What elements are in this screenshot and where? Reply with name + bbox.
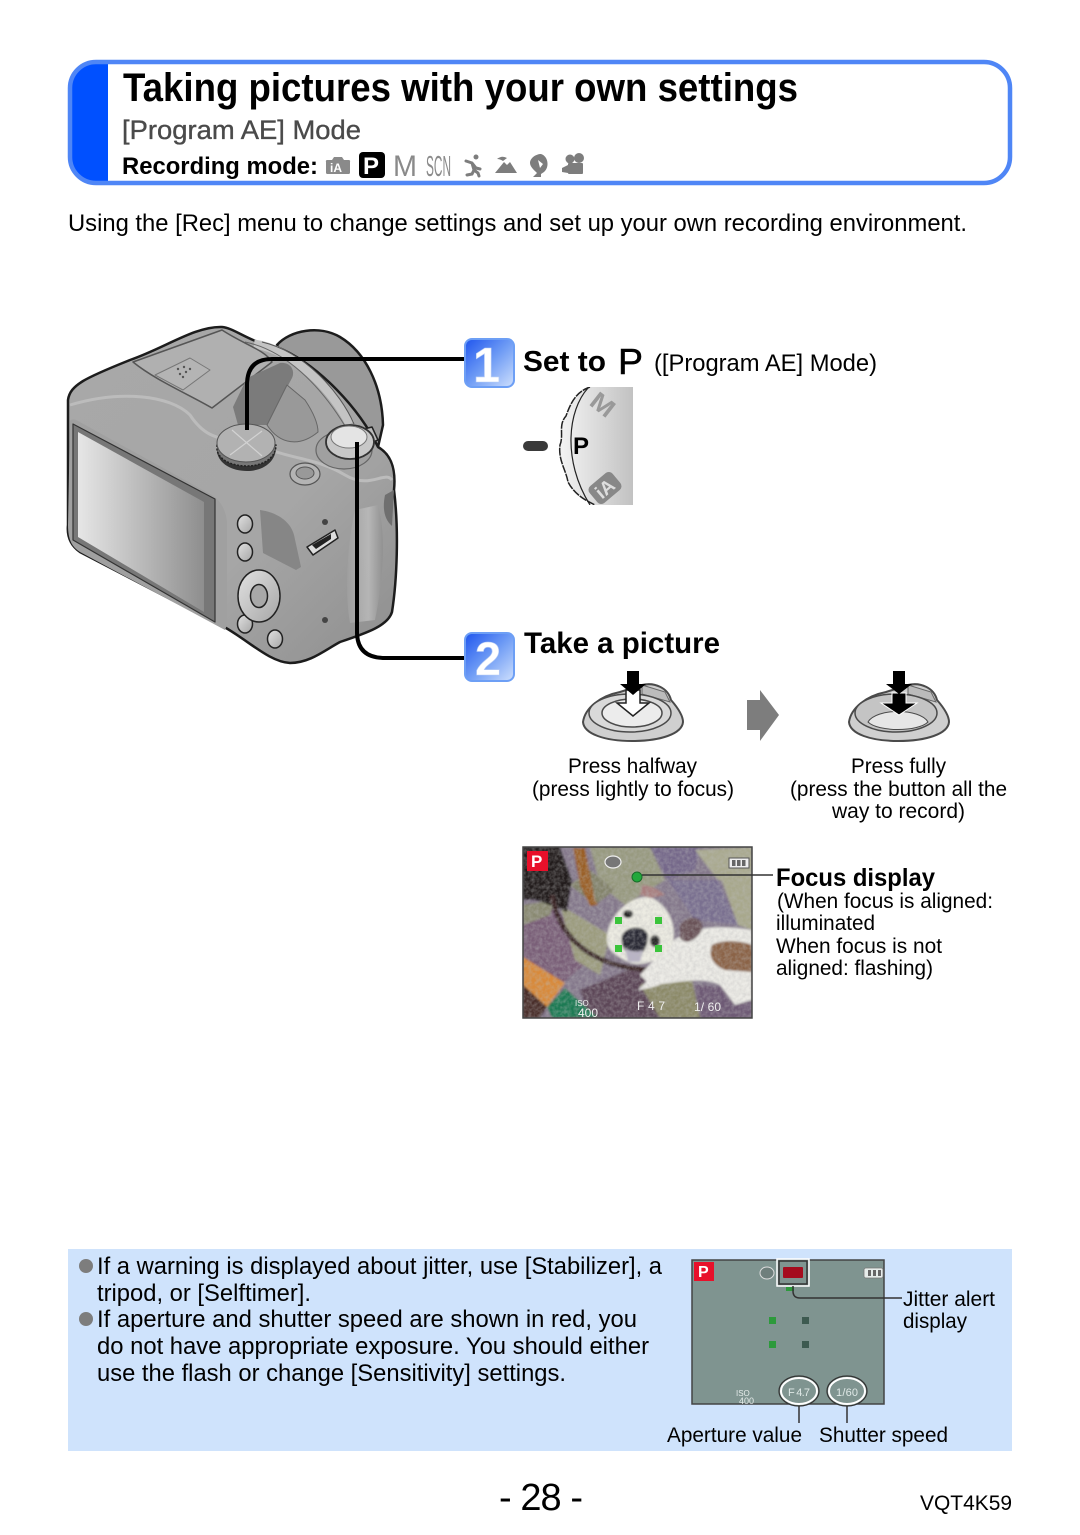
photo readouts: ISO bbox=[575, 999, 589, 1008]
icon: motion picture bbox=[562, 153, 584, 174]
icon: P: P bbox=[618, 341, 643, 382]
rear buttons bbox=[238, 515, 282, 648]
icon: sports bbox=[466, 154, 480, 176]
photo overlay icons bbox=[605, 856, 749, 868]
photo readouts: F 4 7 bbox=[637, 999, 665, 1013]
camera body bbox=[68, 327, 397, 663]
press fully caption: Press fully bbox=[851, 755, 946, 778]
header panel bbox=[70, 62, 1010, 183]
icon: M mode: M bbox=[393, 150, 417, 183]
press halfway caption: (press lightly to focus) bbox=[532, 778, 734, 801]
tip bullets and text bbox=[79, 1253, 663, 1387]
subtitle: [Program AE] Mode bbox=[122, 115, 361, 145]
step 2 badge: 2 bbox=[475, 632, 501, 685]
focus display text: illuminated bbox=[776, 912, 875, 935]
shutter highlight bbox=[827, 1376, 867, 1406]
icon: scenery bbox=[495, 157, 517, 173]
recording mode row: Recording mode: bbox=[122, 153, 318, 180]
leader line to dial bbox=[247, 359, 466, 430]
press fully caption: way to record) bbox=[831, 800, 965, 823]
tip bullets and text: If aperture and shutter speed are shown in red, you bbox=[97, 1306, 637, 1333]
jitter alert label: display bbox=[903, 1310, 967, 1333]
strap lug bbox=[307, 530, 338, 555]
leash bbox=[552, 895, 652, 970]
pavement bbox=[523, 847, 752, 1018]
shutter button bbox=[316, 425, 378, 469]
focus frame markers bbox=[615, 917, 662, 952]
dog body bbox=[640, 927, 752, 1005]
photo readouts: 400 bbox=[578, 1006, 598, 1020]
step 1 badge: 1 bbox=[473, 339, 500, 393]
focus markers bbox=[769, 1287, 794, 1348]
person dark leg bbox=[523, 847, 572, 912]
grip highlight bbox=[347, 505, 383, 623]
small button top bbox=[290, 463, 320, 485]
jitter screen bbox=[692, 1259, 884, 1406]
aperture highlight: F 4.7 bbox=[788, 1387, 810, 1399]
step 2 heading: Take a picture bbox=[524, 627, 720, 660]
jitter alert label: Jitter alert bbox=[903, 1288, 995, 1311]
step 1 badge bbox=[465, 339, 514, 393]
photo readouts: 1/ 60 bbox=[694, 1000, 721, 1014]
camera lens bbox=[277, 330, 383, 447]
press halfway caption: Press halfway bbox=[568, 755, 697, 778]
camera illustration bbox=[68, 327, 397, 663]
focus leader line bbox=[642, 874, 773, 876]
focus display text: (When focus is aligned: bbox=[777, 890, 993, 913]
mode dial detail bbox=[523, 387, 633, 507]
photo readouts bbox=[575, 999, 721, 1020]
focus display text bbox=[776, 864, 993, 980]
arrow between steps bbox=[747, 690, 779, 741]
aperture and shutter leader lines bbox=[799, 1406, 847, 1423]
aperture highlight bbox=[779, 1376, 819, 1406]
mode dial bbox=[217, 424, 276, 471]
icon: iA mode bbox=[326, 157, 350, 175]
leader line to shutter bbox=[357, 442, 466, 658]
photo grain bbox=[523, 847, 752, 1018]
press halfway caption bbox=[532, 755, 734, 801]
tips panel bbox=[68, 1249, 1012, 1451]
P badge bbox=[694, 1262, 714, 1281]
mode dial detail: M bbox=[584, 387, 620, 424]
step 1 heading bbox=[523, 341, 877, 382]
P badge on photo: P bbox=[531, 852, 542, 871]
title: Taking pictures with your own settings bbox=[123, 66, 798, 110]
dog head bbox=[607, 897, 674, 964]
photo: focus display screen bbox=[523, 847, 752, 1020]
mode dial detail: P bbox=[573, 433, 589, 460]
recording mode row bbox=[122, 150, 584, 183]
page number: - 28 - bbox=[499, 1477, 583, 1519]
jitter screen: ISO bbox=[736, 1389, 750, 1398]
shutter highlight: 1/60 bbox=[836, 1387, 858, 1399]
press fully caption: (press the button all the bbox=[790, 778, 1007, 801]
mode dial detail: iA bbox=[592, 475, 620, 504]
side panel bbox=[260, 510, 301, 570]
step 2 badge bbox=[465, 632, 514, 685]
step 1 heading: ([Program AE] Mode) bbox=[654, 350, 877, 377]
press fully illustration bbox=[849, 671, 949, 741]
recording mode row: SCN bbox=[426, 151, 451, 183]
shutter speed label: Shutter speed bbox=[819, 1423, 948, 1447]
press fully caption bbox=[790, 755, 1007, 823]
icon: P mode selected bbox=[359, 152, 385, 180]
P badge: P bbox=[698, 1264, 709, 1281]
tip bullets and text: tripod, or [Selftimer]. bbox=[97, 1280, 311, 1307]
LCD screen bbox=[68, 419, 227, 630]
jitter screen: 400 bbox=[739, 1396, 754, 1406]
screen icons bbox=[760, 1267, 774, 1279]
icon: P mode selected: P bbox=[363, 153, 379, 180]
P badge on photo bbox=[527, 851, 548, 871]
orange object bbox=[523, 957, 565, 1007]
document code: VQT4K59 bbox=[920, 1492, 1012, 1515]
flash top bbox=[133, 330, 272, 408]
focus display text: When focus is not bbox=[776, 935, 942, 958]
focus indicator bbox=[632, 872, 642, 882]
aperture value label: Aperture value bbox=[667, 1423, 802, 1447]
press halfway illustration bbox=[583, 671, 683, 741]
viewfinder ramp bbox=[233, 363, 293, 425]
jitter alert label bbox=[903, 1288, 995, 1333]
tip bullets and text: do not have appropriate exposure. You should either bbox=[97, 1333, 649, 1360]
step 1 heading: Set to bbox=[523, 346, 606, 378]
tip bullets and text: If a warning is displayed about jitter, use [Stabilizer], a bbox=[97, 1253, 663, 1280]
focus display text: Focus display bbox=[776, 864, 935, 892]
icon: portrait bbox=[530, 154, 548, 177]
focus display text: aligned: flashing) bbox=[776, 957, 933, 980]
icon: iA mode: iA bbox=[330, 161, 342, 175]
intro text: Using the [Rec] menu to change settings and set up your own recording environment. bbox=[68, 210, 967, 237]
tip bullets and text: use the flash or change [Sensitivity] settings. bbox=[97, 1360, 566, 1387]
jitter alert highlight bbox=[777, 1259, 809, 1286]
jitter leader line bbox=[793, 1286, 902, 1298]
